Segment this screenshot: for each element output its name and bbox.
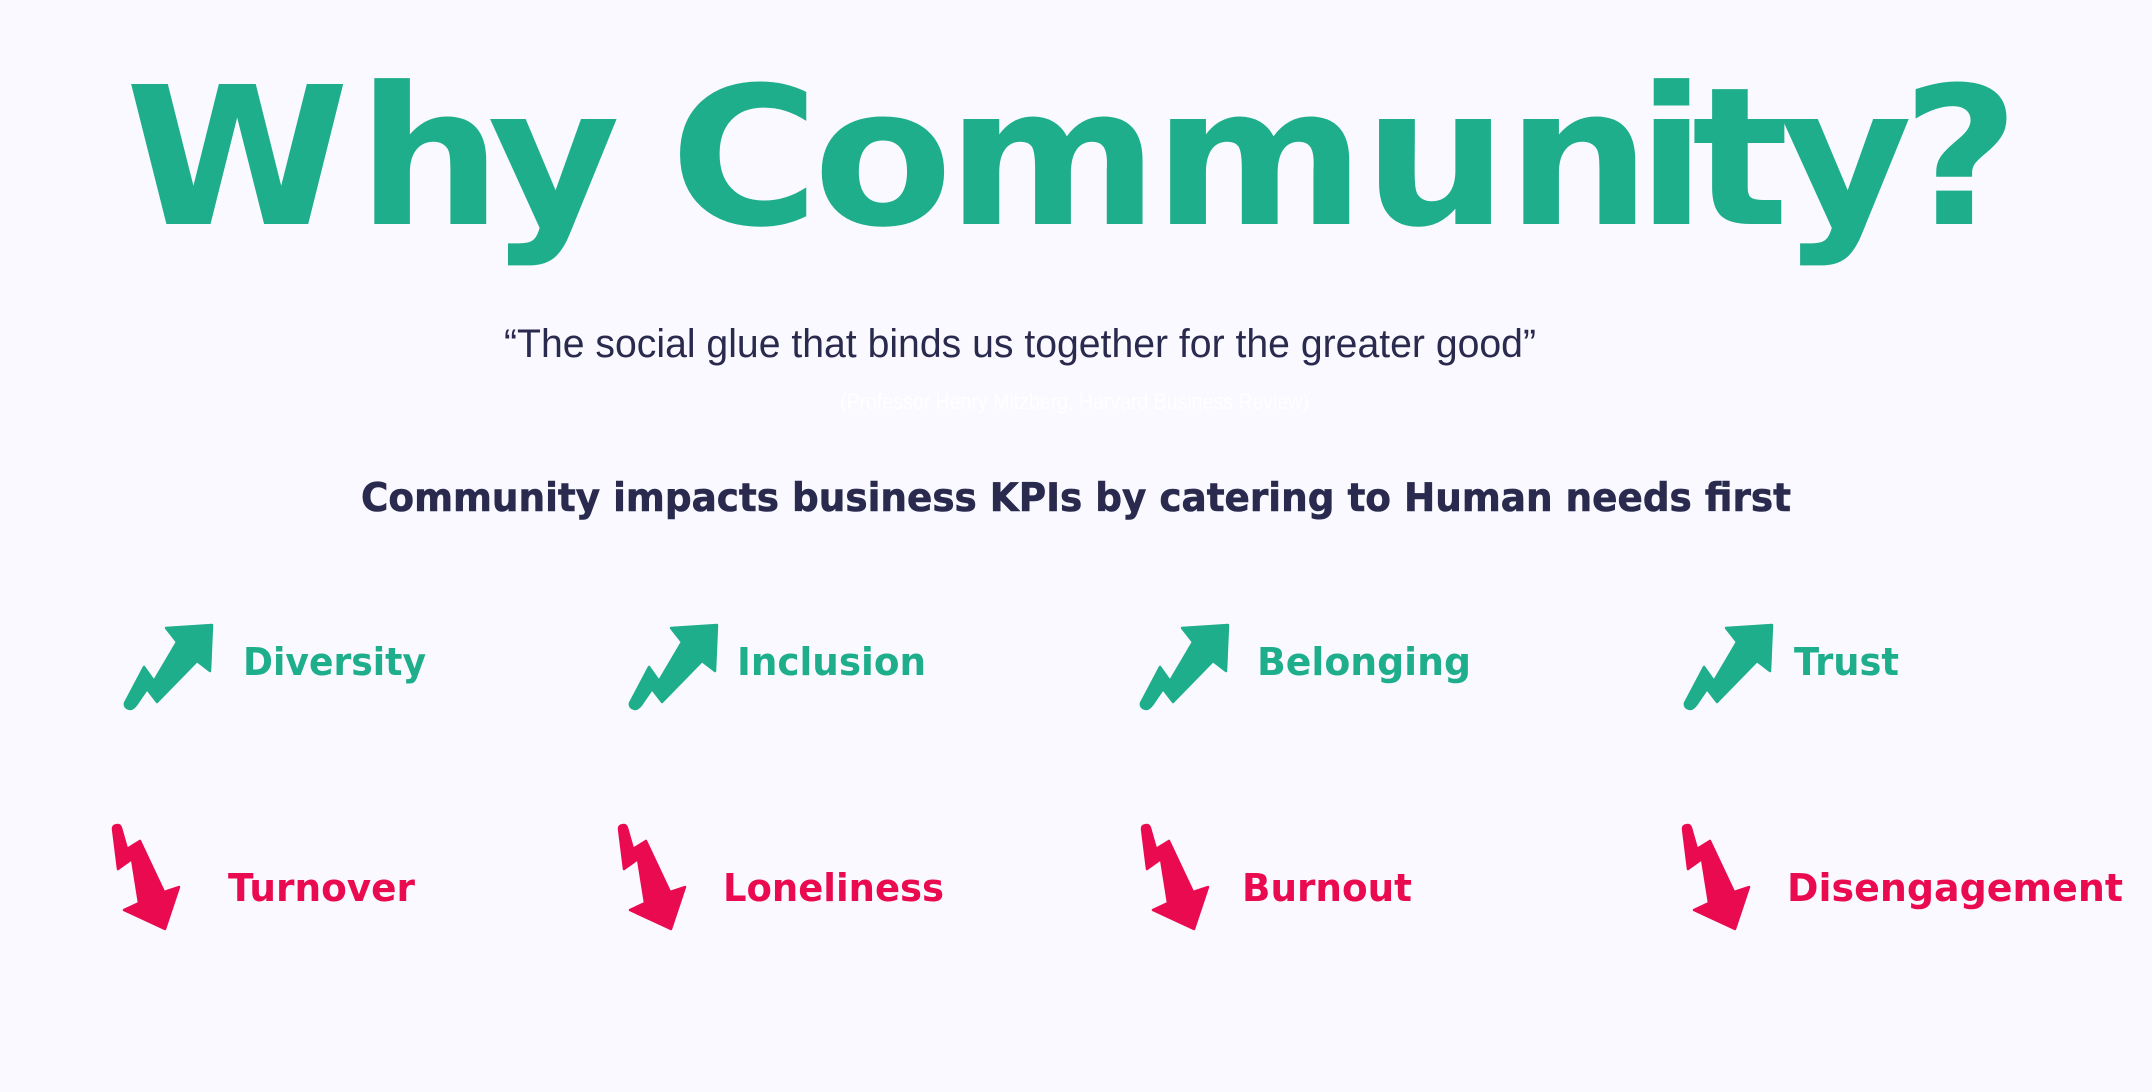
label: Disengagement: Disengagement xyxy=(1787,866,2123,910)
label: Diversity: Diversity xyxy=(243,640,426,684)
icon: arrow down xyxy=(1142,825,1208,929)
label: Belonging: Belonging xyxy=(1257,640,1471,684)
attribution: (Professor Henry Mitzberg, Harvard Business Review) xyxy=(840,389,1309,414)
label: Burnout: Burnout xyxy=(1242,866,1412,910)
icon: arrow down xyxy=(619,825,685,929)
icon: arrow down xyxy=(113,825,179,929)
label: Loneliness: Loneliness xyxy=(723,866,944,910)
icon: arrow up xyxy=(1685,625,1772,709)
title: Why Community? xyxy=(125,45,2020,270)
label: Trust: Trust xyxy=(1794,640,1899,684)
negative KPI: Disengagement xyxy=(1683,825,2123,929)
icon: arrow up xyxy=(1141,625,1228,709)
label: Inclusion: Inclusion xyxy=(737,640,926,684)
positive KPI: Belonging xyxy=(1141,625,1471,709)
icon: arrow up xyxy=(630,625,717,709)
icon: arrow down xyxy=(1683,825,1749,929)
label: Turnover: Turnover xyxy=(228,866,415,910)
negative KPI: Turnover xyxy=(113,825,415,929)
positive KPI: Trust xyxy=(1685,625,1899,709)
quote: “The social glue that binds us together for the greater good” xyxy=(504,322,1536,366)
negative KPI: Loneliness xyxy=(619,825,944,929)
negative KPI: Burnout xyxy=(1142,825,1412,929)
positive KPI: Diversity xyxy=(125,625,426,709)
positive KPI: Inclusion xyxy=(630,625,926,709)
icon: arrow up xyxy=(125,625,212,709)
subheading: Community impacts business KPIs by catering to Human needs first xyxy=(361,476,1791,521)
